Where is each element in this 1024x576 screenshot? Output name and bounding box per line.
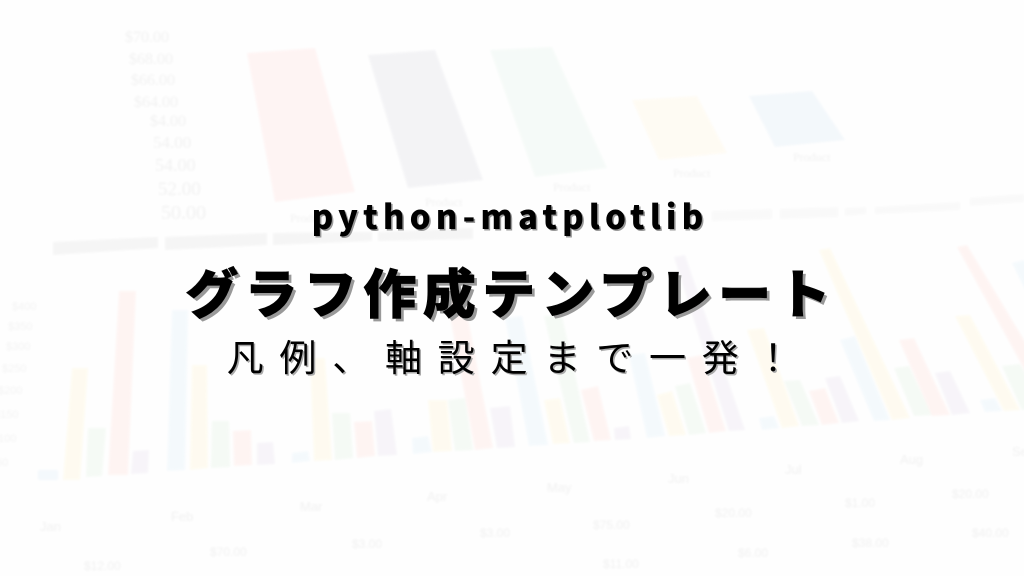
Jul bars	[747, 328, 859, 430]
Aug bars	[819, 248, 970, 421]
Mar bars	[292, 358, 397, 463]
upper chart axis labels: Product	[793, 150, 831, 164]
upper chart axis labels: Product	[290, 211, 328, 225]
lower chart axis labels	[0, 301, 36, 469]
month and value table: $6.00	[738, 546, 768, 560]
month and value table: $3.00	[480, 526, 510, 540]
month and value table: $12.00	[84, 559, 121, 573]
month and value table: Aug	[900, 452, 923, 467]
upper chart axis labels: $70.00	[125, 29, 169, 46]
month and value table: $70.00	[210, 545, 247, 559]
upper chart axis labels	[125, 29, 831, 225]
month and value table: Jul	[785, 462, 802, 477]
Jun bars	[629, 255, 745, 438]
title: main heading: グラフ作成テンプレート	[185, 253, 837, 329]
upper table header strips	[53, 194, 1024, 255]
upper chart axis labels: $66.00	[131, 72, 175, 89]
month and value table: $20.00	[715, 506, 752, 520]
lower chart axis labels: $250	[2, 363, 26, 375]
month and value table: May	[547, 480, 572, 495]
month and value table: Apr	[427, 489, 448, 504]
upper chart axis labels: Product	[425, 195, 463, 209]
Jan bars	[38, 291, 149, 480]
upper bar chart	[247, 47, 845, 202]
month and value table: Mar	[300, 499, 323, 514]
month and value table: $38.00	[852, 536, 889, 550]
lower grouped bar chart	[38, 245, 1024, 480]
lower chart axis labels: $400	[12, 301, 36, 313]
upper chart axis labels: $68.00	[129, 51, 173, 68]
month and value table: $75.00	[593, 518, 630, 532]
upper chart axis labels: 52.00	[158, 179, 201, 200]
upper chart axis labels: Product	[673, 166, 711, 180]
lower chart axis labels: $350	[8, 321, 32, 333]
title: python-matplotlib: python-matplotlib	[312, 191, 708, 239]
month and value table: $40.00	[972, 526, 1009, 540]
Apr bars	[412, 298, 515, 454]
month and value table: Jun	[668, 471, 689, 486]
May bars	[505, 316, 631, 446]
upper chart axis labels: Product	[553, 180, 591, 194]
upper chart axis labels: $4.00	[150, 113, 186, 130]
Feb bars	[167, 310, 275, 471]
month and value table	[40, 444, 1024, 573]
month and value table: Jan	[40, 519, 61, 534]
upper chart axis labels: $64.00	[134, 94, 178, 111]
upper chart axis labels: 54.00	[153, 133, 191, 152]
Sep bars	[955, 245, 1024, 412]
upper chart axis labels: 50.00	[161, 202, 206, 224]
lower chart axis labels: $300	[6, 341, 30, 353]
upper chart axis labels: 54.00	[155, 155, 196, 175]
month and value table: $3.00	[352, 537, 382, 551]
month and value table: $11.00	[603, 557, 639, 571]
month and value table: Feb	[171, 509, 193, 524]
month and value table: $20.00	[952, 487, 989, 501]
subtitle: 凡例、軸設定まで一発！	[227, 328, 807, 382]
month and value table: $1.00	[845, 496, 875, 510]
